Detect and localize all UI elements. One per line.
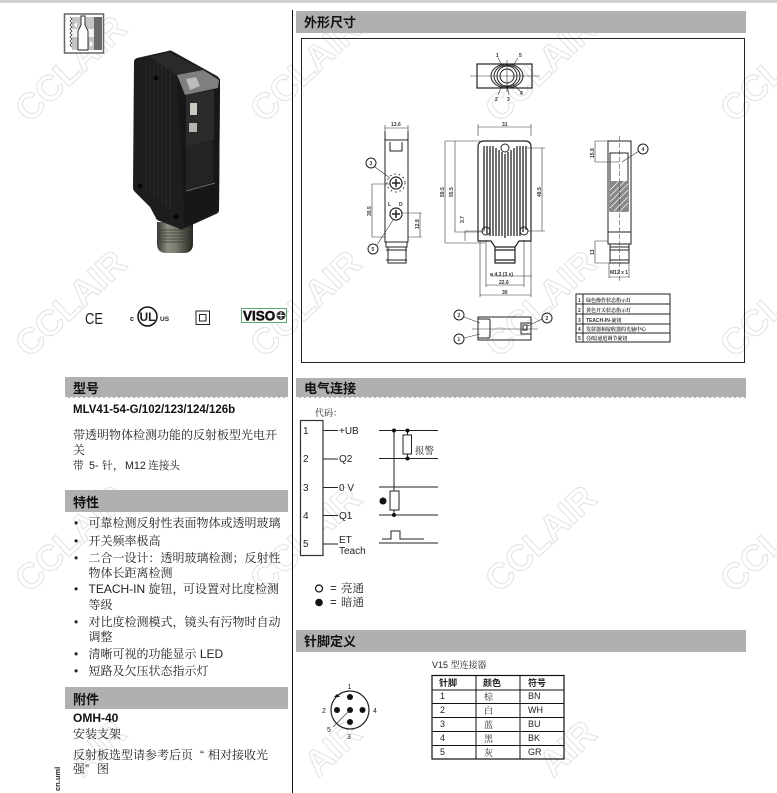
list: features: • [74, 534, 78, 548]
drawing: side view [366, 122, 422, 263]
legend: light on / dark on: 亮通 [341, 582, 364, 595]
watermark: CCLAIR [242, 7, 369, 130]
heading: accessories: 附件 [73, 692, 99, 707]
text: connector type: V15 型连接器 [432, 659, 487, 670]
table: part legend: 绿色操作状态指示灯 [586, 297, 631, 304]
list: features: • [74, 516, 78, 530]
table: pin colours: 蓝 [484, 719, 493, 730]
list: features: • [74, 615, 78, 629]
table: pin colours: 符号 [528, 676, 546, 689]
legend: light on / dark on [315, 582, 364, 609]
table: part legend [576, 294, 670, 342]
heading: pin definition: 针脚定义 [304, 634, 356, 649]
text: accessories: OMH-40 [73, 711, 119, 725]
circuit: wiring diagram [379, 428, 438, 543]
heading: features [65, 490, 288, 512]
table: pin colours: 颜色 [483, 676, 501, 689]
watermark: AIR [296, 712, 369, 784]
watermark: CCLAIR [242, 242, 369, 365]
watermark: CCLAIR [242, 477, 369, 600]
watermark: CCLAIR [477, 242, 604, 365]
text: accessories: 图 [97, 762, 109, 776]
drawing: front view: 3.7 [460, 216, 466, 223]
circuit: pin block: ET [339, 535, 352, 546]
list: features: 可设置对比度检测 [183, 581, 279, 596]
list: features: 对比度检测模式，镜头有污物时自动 [88, 614, 281, 629]
diagram: connector pins: 2 [322, 708, 326, 715]
text: model number and description: 连接头 [148, 459, 180, 472]
list: features: 二合一设计：透明玻璃检测；反射性 [88, 550, 281, 565]
list: features: TEACH-IN 旋钮， [88, 582, 185, 596]
drawing: right view: M12 x 1 [610, 270, 628, 276]
drawing: front view: ø 4.3 (3 x) [490, 272, 513, 278]
diagram: connector pins: 1 [348, 684, 352, 691]
legend: light on / dark on: = [330, 597, 337, 609]
drawing: side view: 12.8 [415, 219, 421, 229]
drawing: bottom view: 1 [458, 337, 460, 343]
heading: dimensions: 外形尺寸 [304, 15, 356, 30]
table: pin colours: WH [528, 705, 543, 715]
drawing: connector end view: 4 [520, 91, 523, 97]
diagram: connector pins: 5 [327, 727, 331, 734]
list: features: 清晰可视的功能显示 LED [88, 646, 224, 661]
drawing: front view: 31 [502, 122, 508, 128]
diagram: connector pins [322, 684, 377, 741]
icon: cULus mark: UL [140, 310, 156, 324]
diagram: connector pins: 4 [373, 708, 377, 715]
text: model number and description: 关 [73, 443, 85, 457]
margin code: cn.uml [53, 767, 62, 791]
drawing: front view: 55.5 [449, 187, 455, 197]
watermark: CCLAIR [477, 477, 604, 600]
circuit: pin block: Q2 [339, 454, 353, 465]
table: pin colours: 棕 [484, 691, 494, 702]
table: pin colours: 2 [440, 705, 445, 715]
table: part legend: 5 [578, 336, 581, 342]
heading: model [65, 377, 288, 398]
watermark: CCLAIR [7, 242, 134, 365]
drawing: connector end view [470, 53, 540, 103]
circuit: pin block [300, 407, 366, 557]
drawing: side view: L [388, 202, 391, 208]
list: features: 可靠检测反射性表面物体或透明玻璃 [88, 515, 281, 530]
drawing: bottom view: 2 [458, 313, 460, 319]
drawing: right view: 4 [642, 147, 644, 153]
text: model number and description: 带透明物体检测功能的反射板型光电开 [73, 427, 277, 442]
list: features: • [74, 582, 78, 596]
watermark: AIR [531, 712, 604, 784]
icon: VISO logo: VISO [243, 308, 275, 324]
table: part legend: 3 [578, 318, 581, 324]
circuit: wiring diagram: 报警 [415, 445, 435, 457]
circuit: pin block: 代码： [315, 407, 342, 418]
text: accessories: 安装支架 [73, 726, 121, 741]
drawing: right view: 13 [590, 249, 596, 255]
table: part legend: 发射器和接收器的光轴中心 [586, 326, 647, 333]
drawing: connector end view: 1 [496, 53, 499, 59]
drawing: side view: 13.6 [391, 122, 401, 128]
text: model number and description: ， [113, 460, 124, 472]
heading: pin definition [296, 630, 746, 652]
list: features: • [74, 551, 78, 565]
panel: dimension drawing [302, 38, 744, 362]
icon: cULus mark: c [130, 316, 134, 323]
table: part legend: 4 [578, 327, 581, 333]
circuit: pin block: Q1 [339, 511, 353, 522]
table: pin colours: BU [528, 719, 541, 729]
heading: dimensions [296, 11, 746, 33]
circuit: pin block: 4 [303, 511, 309, 522]
drawing: front view: 48.5 [537, 187, 543, 197]
legend: light on / dark on: 暗通 [341, 595, 364, 609]
heading: features: 特性 [73, 495, 99, 510]
text: model number and description: 5- [89, 460, 99, 472]
list: features: • [74, 647, 78, 661]
circuit: pin block: Teach [339, 546, 366, 557]
drawing: right view: 15.8 [590, 148, 596, 158]
table: part legend: 亮/暗通道调节旋钮 [586, 335, 627, 342]
drawing: connector end view: 2 [495, 97, 498, 103]
watermark: CCLAIR [7, 7, 134, 130]
text: model number and description: MLV41-54-G/102/123/124/126b [73, 404, 235, 416]
heading: electrical connection [296, 378, 746, 398]
text: accessories: 相对接收光 [208, 747, 268, 762]
table: pin colours: GR [528, 747, 542, 757]
product photo: sensor [133, 50, 220, 253]
watermark: AIR [61, 712, 134, 784]
list: features [74, 515, 281, 678]
drawing: side view: 3 [370, 161, 372, 167]
drawing: front view: 30 [502, 290, 508, 296]
text: model number and description [73, 404, 277, 472]
circuit: pin block: 2 [303, 454, 309, 465]
icon: CE mark: CE [85, 311, 103, 328]
table: pin colours: 针脚 [439, 676, 457, 689]
table: pin colours: BN [528, 691, 541, 701]
table: pin colours: BK [528, 733, 540, 743]
drawing: front view: 22.6 [499, 280, 509, 286]
drawing: connector end view: 3 [507, 97, 510, 103]
table: part legend: TEACH-IN-旋钮 [586, 317, 622, 324]
drawing: front view: 59.5 [440, 187, 446, 197]
table: pin colours: 灰 [484, 747, 493, 758]
text: accessories: 强” [73, 762, 89, 776]
circuit: pin block: 0 V [339, 483, 354, 494]
table: pin colours [432, 675, 564, 759]
drawing: bottom view: 2 [546, 316, 548, 322]
legend: light on / dark on: = [330, 583, 337, 595]
text: accessories [73, 711, 268, 776]
list: features: 等级 [88, 598, 113, 612]
table: pin colours: 1 [440, 691, 445, 701]
table: pin colours: 3 [440, 719, 445, 729]
heading: accessories [65, 687, 288, 709]
icon: bottle sensing mode [64, 14, 104, 53]
drawing: side view: 30.5 [367, 206, 373, 216]
table: pin colours: 4 [440, 733, 445, 743]
drawing: right view [590, 136, 648, 281]
drawing: front view [440, 122, 545, 297]
list: features: • [74, 664, 78, 678]
table: part legend: 1 [578, 298, 581, 304]
drawing: side view: D [399, 202, 403, 208]
drawing: side view: 5 [372, 247, 374, 253]
list: features: 短路及欠压状态指示灯 [88, 663, 209, 678]
diagram: connector pins: 3 [347, 734, 351, 741]
text: accessories: 反射板选型请参考后页 [73, 748, 193, 762]
table: part legend: 黄色开关状态指示灯 [586, 307, 631, 314]
drawing: connector end view: 5 [519, 53, 522, 59]
heading: model: 型号 [73, 381, 99, 396]
icon: cULus mark: US [160, 316, 170, 323]
circuit: pin block: 5 [303, 539, 309, 550]
text: accessories: “ [200, 748, 204, 762]
table: pin colours: 黑 [484, 734, 494, 744]
circuit: pin block: +UB [339, 426, 359, 437]
text: model number and description: 针 [102, 459, 113, 472]
table: pin colours: 5 [440, 747, 445, 757]
table: part legend: 2 [578, 308, 581, 314]
icon: double insulation [196, 311, 210, 324]
watermark: CCLAIR [477, 7, 604, 130]
icon: cULus mark [130, 307, 170, 326]
text: model number and description: M12 [125, 460, 146, 472]
circuit: pin block: 1 [303, 426, 309, 437]
drawing: bottom view [454, 310, 552, 344]
list: features: 物体长距离检测 [88, 565, 173, 580]
watermark: CCLAIR [7, 477, 134, 600]
list: features: 开关频率极高 [88, 533, 161, 548]
list: features: 调整 [88, 629, 113, 644]
table: pin colours: 白 [484, 705, 493, 716]
text: model number and description: 带 [73, 460, 84, 472]
heading: electrical connection: 电气连接 [304, 381, 356, 396]
circuit: pin block: 3 [303, 483, 309, 494]
